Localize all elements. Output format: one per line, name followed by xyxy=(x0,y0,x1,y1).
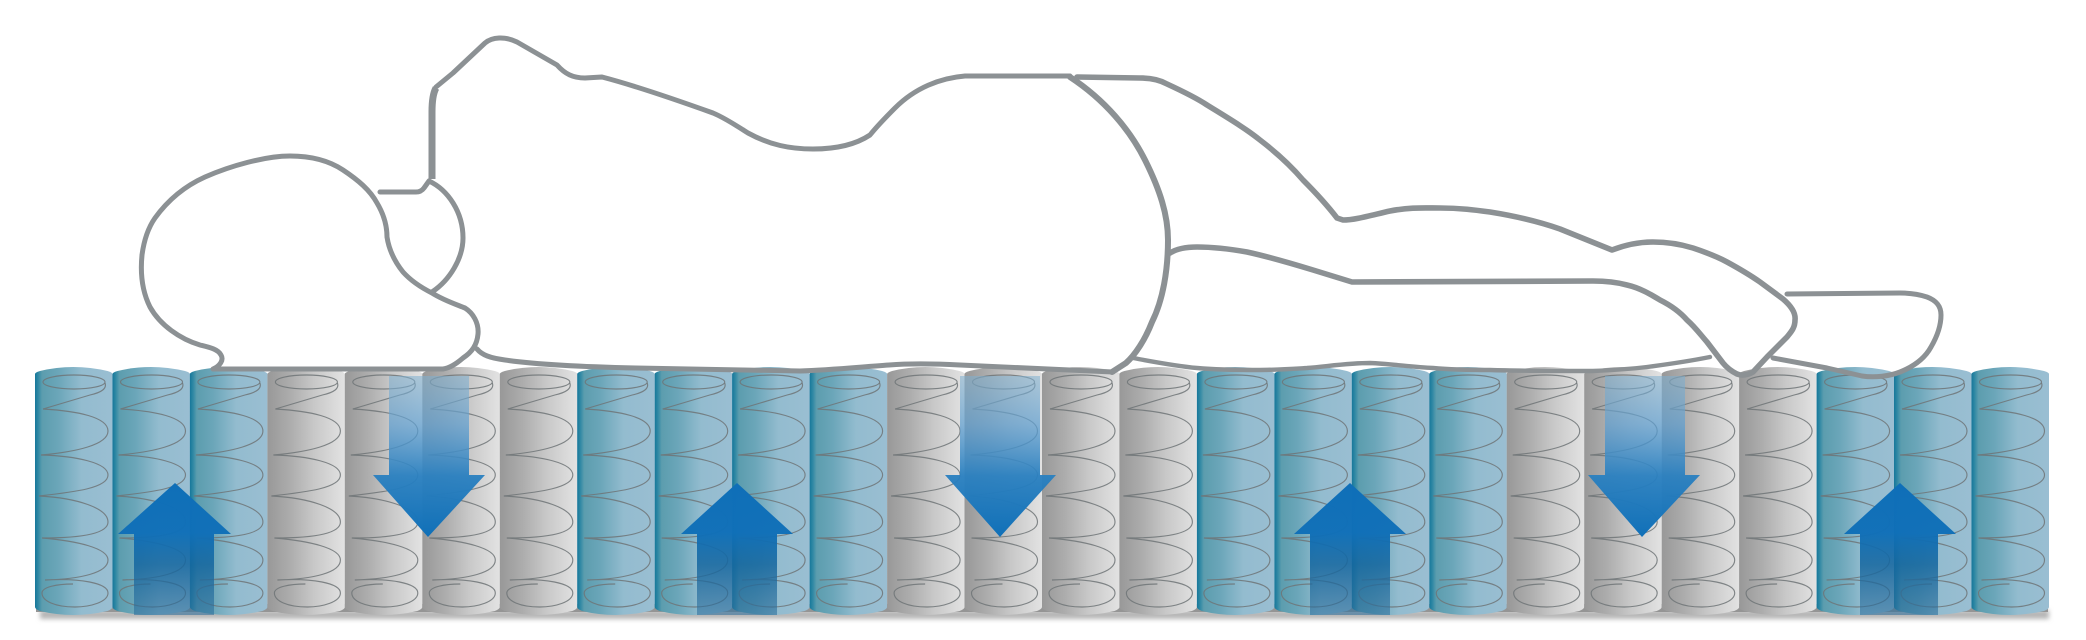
spring 23 (gray) xyxy=(1739,367,1817,615)
legs xyxy=(1077,77,1795,375)
shoulder and chest xyxy=(436,38,1070,149)
spring 6 (gray) xyxy=(422,367,500,615)
spring 22 (gray) xyxy=(1662,367,1739,615)
spring 17 (blue) xyxy=(1274,367,1352,615)
spring 26 (blue) xyxy=(1972,367,2049,615)
spring 1 (blue) xyxy=(35,367,112,615)
neck back xyxy=(432,88,436,179)
neck xyxy=(380,181,463,292)
arrow: down 1 xyxy=(373,376,485,537)
spring 24 (blue) xyxy=(1817,367,1894,615)
arrow: down 3 xyxy=(1588,376,1700,537)
head xyxy=(141,156,478,369)
sleeping figure outline xyxy=(141,38,1941,377)
lower leg on mattress xyxy=(1133,357,1710,371)
arrow: up 4 xyxy=(1844,483,1956,615)
back xyxy=(1070,77,1168,372)
spring 18 (blue) xyxy=(1352,367,1429,615)
spring 15 (gray) xyxy=(1119,367,1197,615)
spring 5 (gray) xyxy=(345,367,422,615)
arrow: up 1 xyxy=(118,483,231,615)
spring 12 (gray) xyxy=(887,367,965,615)
spring row xyxy=(35,367,2049,615)
spring 16 (blue) xyxy=(1197,367,1274,615)
spring 13 (gray) xyxy=(964,367,1042,615)
arrow: up 2 xyxy=(681,483,793,615)
foot xyxy=(1773,293,1941,377)
spring 4 (gray) xyxy=(267,367,345,615)
spring 11 (blue) xyxy=(810,367,887,615)
spring 19 (blue) xyxy=(1429,367,1507,615)
belly on mattress xyxy=(477,349,1113,372)
spring 10 (blue) xyxy=(732,367,810,615)
spring 20 (gray) xyxy=(1507,367,1584,615)
arrow: down 2 xyxy=(945,376,1056,537)
arrow: up 3 xyxy=(1294,483,1406,615)
mattress shadow xyxy=(36,604,2049,619)
spring 9 (blue) xyxy=(655,367,732,615)
spring 14 (gray) xyxy=(1042,367,1120,615)
spring 2 (blue) xyxy=(112,367,190,615)
spring 8 (blue) xyxy=(577,367,655,615)
spring 3 (blue) xyxy=(190,367,267,615)
spring 21 (gray) xyxy=(1584,367,1662,615)
spring 7 (gray) xyxy=(500,367,577,615)
spring 25 (blue) xyxy=(1894,367,1972,615)
